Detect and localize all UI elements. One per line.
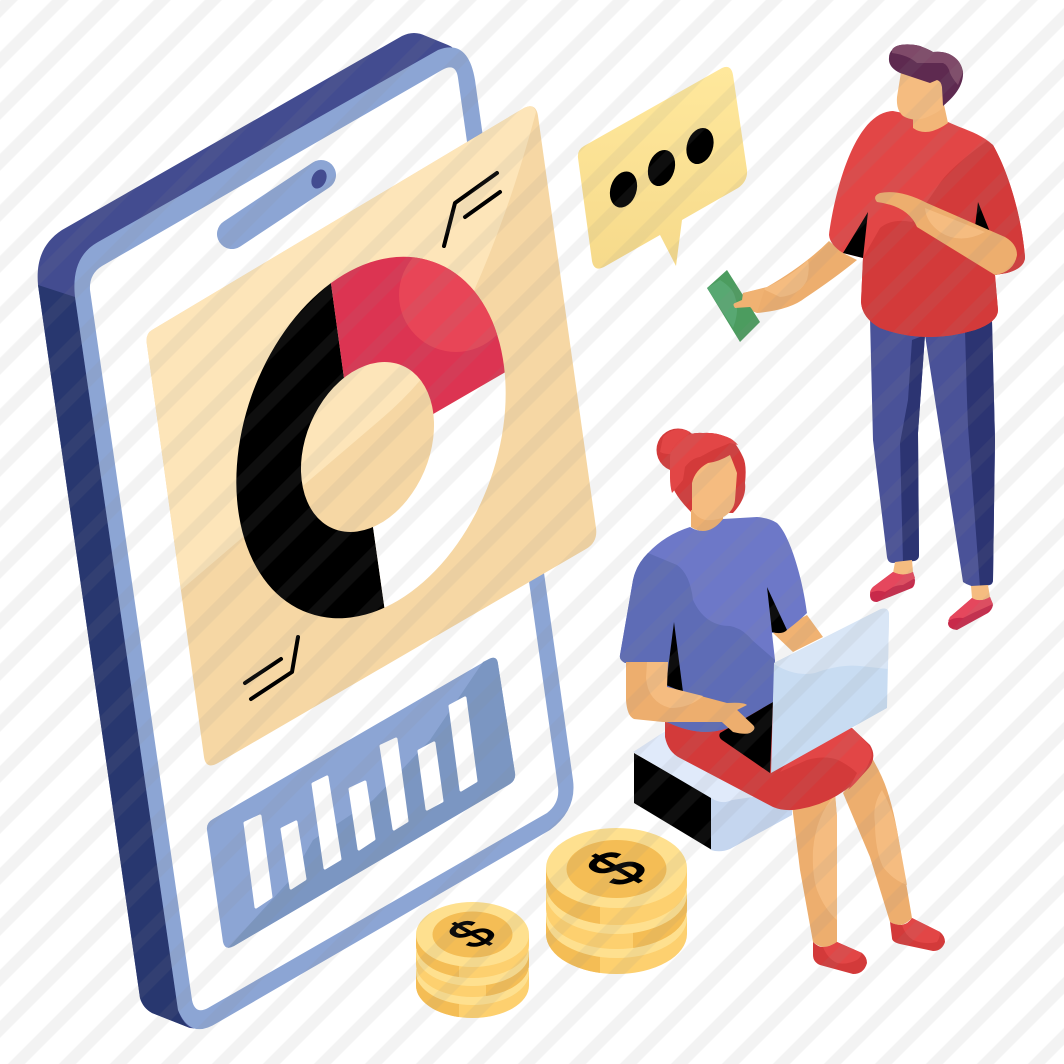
seated woman — [620, 428, 945, 974]
phone dark body — [38, 33, 468, 1029]
speech bubble — [578, 67, 747, 269]
tick marks top — [444, 173, 500, 246]
dollar sign small: $ — [434, 912, 510, 956]
man's near arm — [875, 192, 1017, 275]
woman's skirt — [665, 700, 873, 810]
woman's far arm — [773, 615, 823, 652]
man's hand — [734, 288, 765, 313]
speaker pill — [232, 167, 330, 234]
donut: red segment — [331, 256, 505, 414]
woman's legs — [792, 758, 912, 947]
phone screen — [90, 67, 558, 1010]
man's neck — [913, 100, 948, 132]
man's shoes — [870, 560, 993, 630]
woman's hand — [720, 710, 754, 734]
coin stack large — [546, 828, 687, 974]
woman's face — [692, 455, 737, 520]
bench — [633, 728, 800, 851]
donut: white segment — [373, 372, 506, 608]
bar chart — [207, 658, 515, 948]
dollar sign large: $ — [568, 840, 664, 896]
man's trousers — [870, 318, 995, 587]
phone frame — [74, 47, 574, 1029]
shirt folds — [843, 212, 868, 258]
shirt folds — [666, 622, 683, 692]
woman's shoes — [813, 918, 945, 974]
man's shirt — [829, 111, 1025, 337]
woman's shirt — [620, 517, 807, 732]
laptop screen — [771, 609, 889, 773]
phone side edge — [38, 285, 190, 1028]
woman's near arm — [626, 662, 754, 734]
man's hair — [889, 44, 963, 106]
phone — [38, 33, 574, 1029]
man's far arm — [740, 241, 857, 313]
banknote — [707, 270, 760, 342]
woman's hair — [656, 428, 746, 513]
tick marks bottom — [245, 637, 298, 699]
standing man — [707, 44, 1025, 630]
coin stack small — [416, 902, 529, 1018]
panel: donut chart card — [147, 106, 596, 765]
woman's neck — [691, 510, 723, 532]
laptop keyboard — [719, 702, 773, 773]
donut: black segment — [236, 283, 384, 618]
man's head — [897, 66, 943, 120]
